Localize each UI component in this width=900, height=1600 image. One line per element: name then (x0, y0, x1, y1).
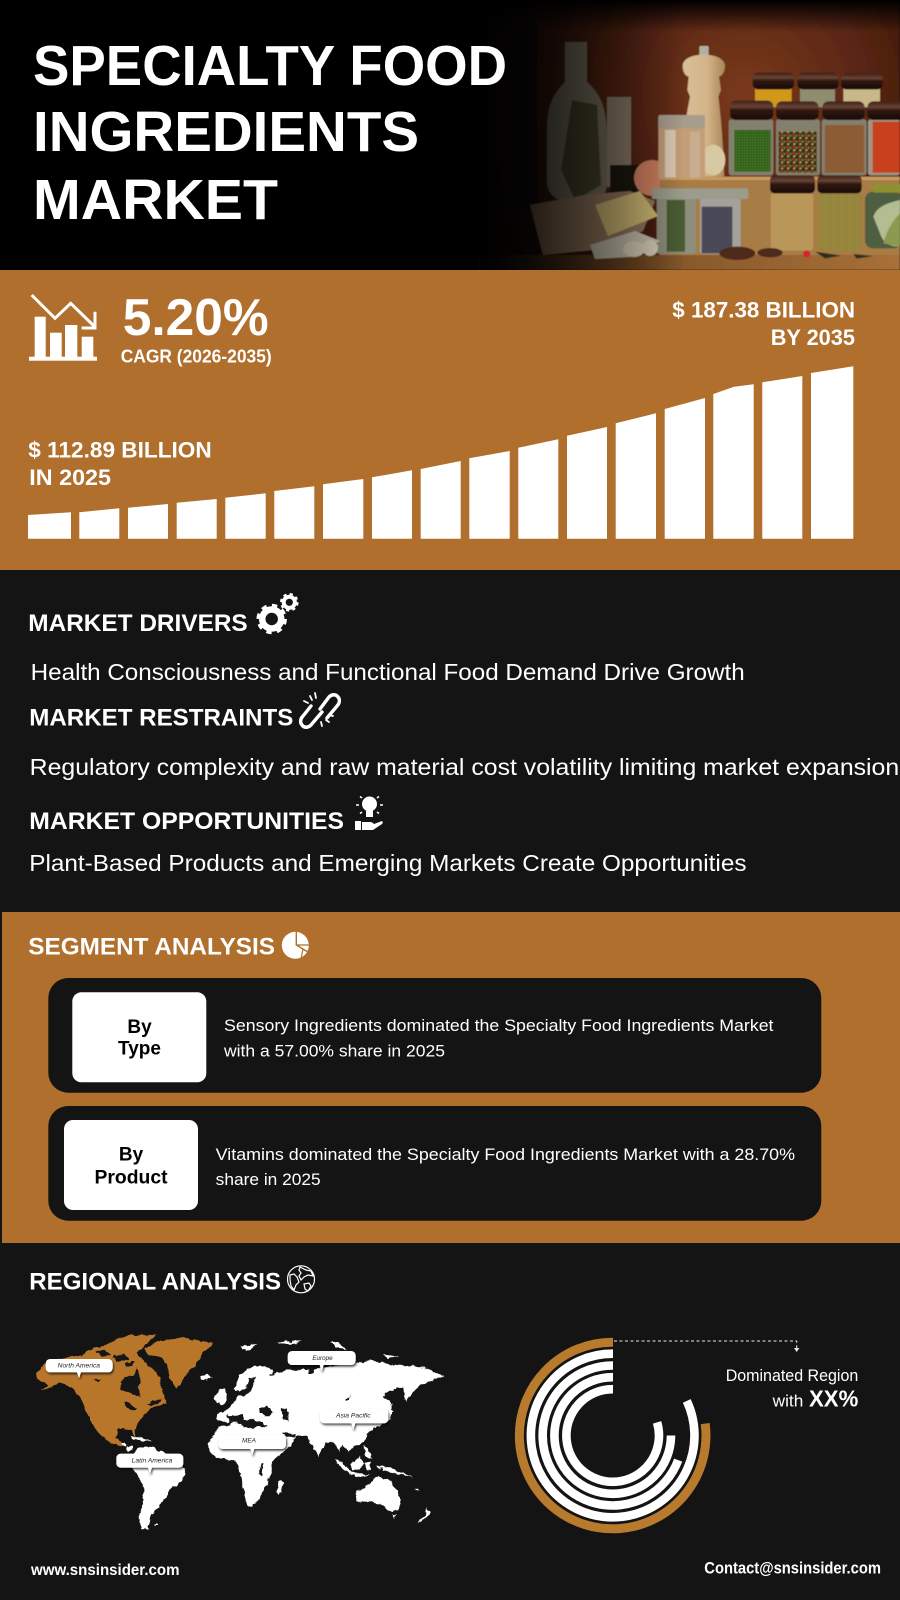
panel: market dynamics (28, 594, 899, 876)
label box: by type: By (127, 1017, 152, 1038)
title: SPECIALTY FOOD (33, 34, 507, 98)
segment text: by product: Vitamins dominated the Specialty Food Ingredients Market with a 28.70% (216, 1145, 795, 1164)
radial bar chart (519, 1342, 706, 1529)
label box: by product: By (119, 1145, 144, 1166)
CAGR label: CAGR (2026-2035) (121, 347, 272, 367)
segment text: by product: share in 2025 (216, 1170, 321, 1189)
jars and shelves (480, 46, 900, 270)
end value label: BY 2035 (771, 325, 855, 350)
map: land masses (35, 1334, 445, 1529)
icon: broken chain (301, 693, 339, 727)
photo illustration: spice jars (480, 0, 900, 270)
title: MARKET (33, 168, 278, 232)
dashed leader arrow (614, 1341, 799, 1352)
callout: dominated region: XX% (809, 1386, 858, 1412)
heading: segment analysis: SEGMENT ANALYSIS (28, 933, 275, 960)
bay leaves and garlic (530, 191, 660, 259)
start value label: IN 2025 (29, 465, 111, 490)
text: restraints: Regulatory complexity and raw material cost volatility limiting market expansion (30, 754, 899, 780)
label box: by type: Type (118, 1038, 161, 1060)
callout: north america: North America (58, 1363, 100, 1370)
end value label (672, 298, 855, 350)
heading: market restraints: MARKET RESTRAINTS (29, 705, 293, 732)
heading: market drivers: MARKET DRIVERS (28, 610, 248, 637)
start value label (28, 438, 212, 490)
label box: by product: Product (94, 1167, 168, 1188)
callout: asia pacific: Asia Pacific (335, 1413, 372, 1420)
callout: europe: Europe (312, 1355, 333, 1362)
label box: by type (72, 992, 206, 1082)
icon: lightbulb in hand (355, 796, 383, 830)
callout: dominated region: with (772, 1392, 803, 1411)
segment card: by product (48, 1106, 821, 1221)
left bottles (510, 25, 670, 215)
callout: MEA: MEA (242, 1438, 256, 1445)
end value label: $ 187.38 BILLION (672, 298, 855, 323)
map: europe asia africa oceania (208, 1341, 445, 1522)
icon: globe (288, 1266, 314, 1293)
map: americas (35, 1334, 213, 1529)
icon: gears (258, 594, 297, 632)
panel: segment analysis (2, 912, 900, 1243)
segment text: by product (216, 1145, 795, 1189)
panel: market size (0, 270, 900, 570)
text: drivers: Health Consciousness and Functional Food Demand Drive Growth (31, 659, 745, 685)
title (33, 34, 507, 232)
middle row (729, 119, 773, 175)
callout: latin america: Latin America (132, 1457, 173, 1464)
callout: europe (288, 1351, 356, 1372)
footer: website: www.snsinsider.com (30, 1562, 180, 1579)
header banner with spice jars photo (0, 0, 900, 270)
panel: regional analysis (29, 1266, 858, 1529)
heading: regional analysis: REGIONAL ANALYSIS (29, 1268, 281, 1295)
front row (771, 193, 813, 251)
segment text: by type: with a 57.00% share in 2025 (223, 1042, 445, 1061)
title: INGREDIENTS (33, 100, 419, 164)
bar chart: market growth (28, 366, 853, 539)
icon: pie chart (282, 932, 309, 959)
segment card: by type (48, 978, 821, 1093)
icon: chart with declining arrow (29, 295, 97, 361)
callout: asia pacific (320, 1409, 388, 1430)
back row (755, 89, 792, 107)
CAGR value: 5.20% (123, 289, 269, 347)
callout: MEA (218, 1435, 286, 1456)
segment text: by type (223, 1016, 774, 1061)
heading: market opportunities: MARKET OPPORTUNITIES (29, 808, 344, 835)
segment text: by type: Sensory Ingredients dominated the Specialty Food Ingredients Market (224, 1016, 774, 1035)
label box: by product (64, 1120, 198, 1210)
callout: north america (46, 1359, 113, 1378)
callout: dominated region (726, 1366, 858, 1412)
world map (35, 1334, 445, 1529)
star anise and berry (719, 247, 755, 260)
start value label: $ 112.89 BILLION (28, 438, 212, 463)
callout: dominated region: Dominated Region (726, 1366, 858, 1385)
callout: latin america (116, 1454, 183, 1474)
text: opportunities: Plant-Based Products and Emerging Markets Create Opportunities (29, 850, 747, 876)
map: region callouts (46, 1351, 388, 1474)
